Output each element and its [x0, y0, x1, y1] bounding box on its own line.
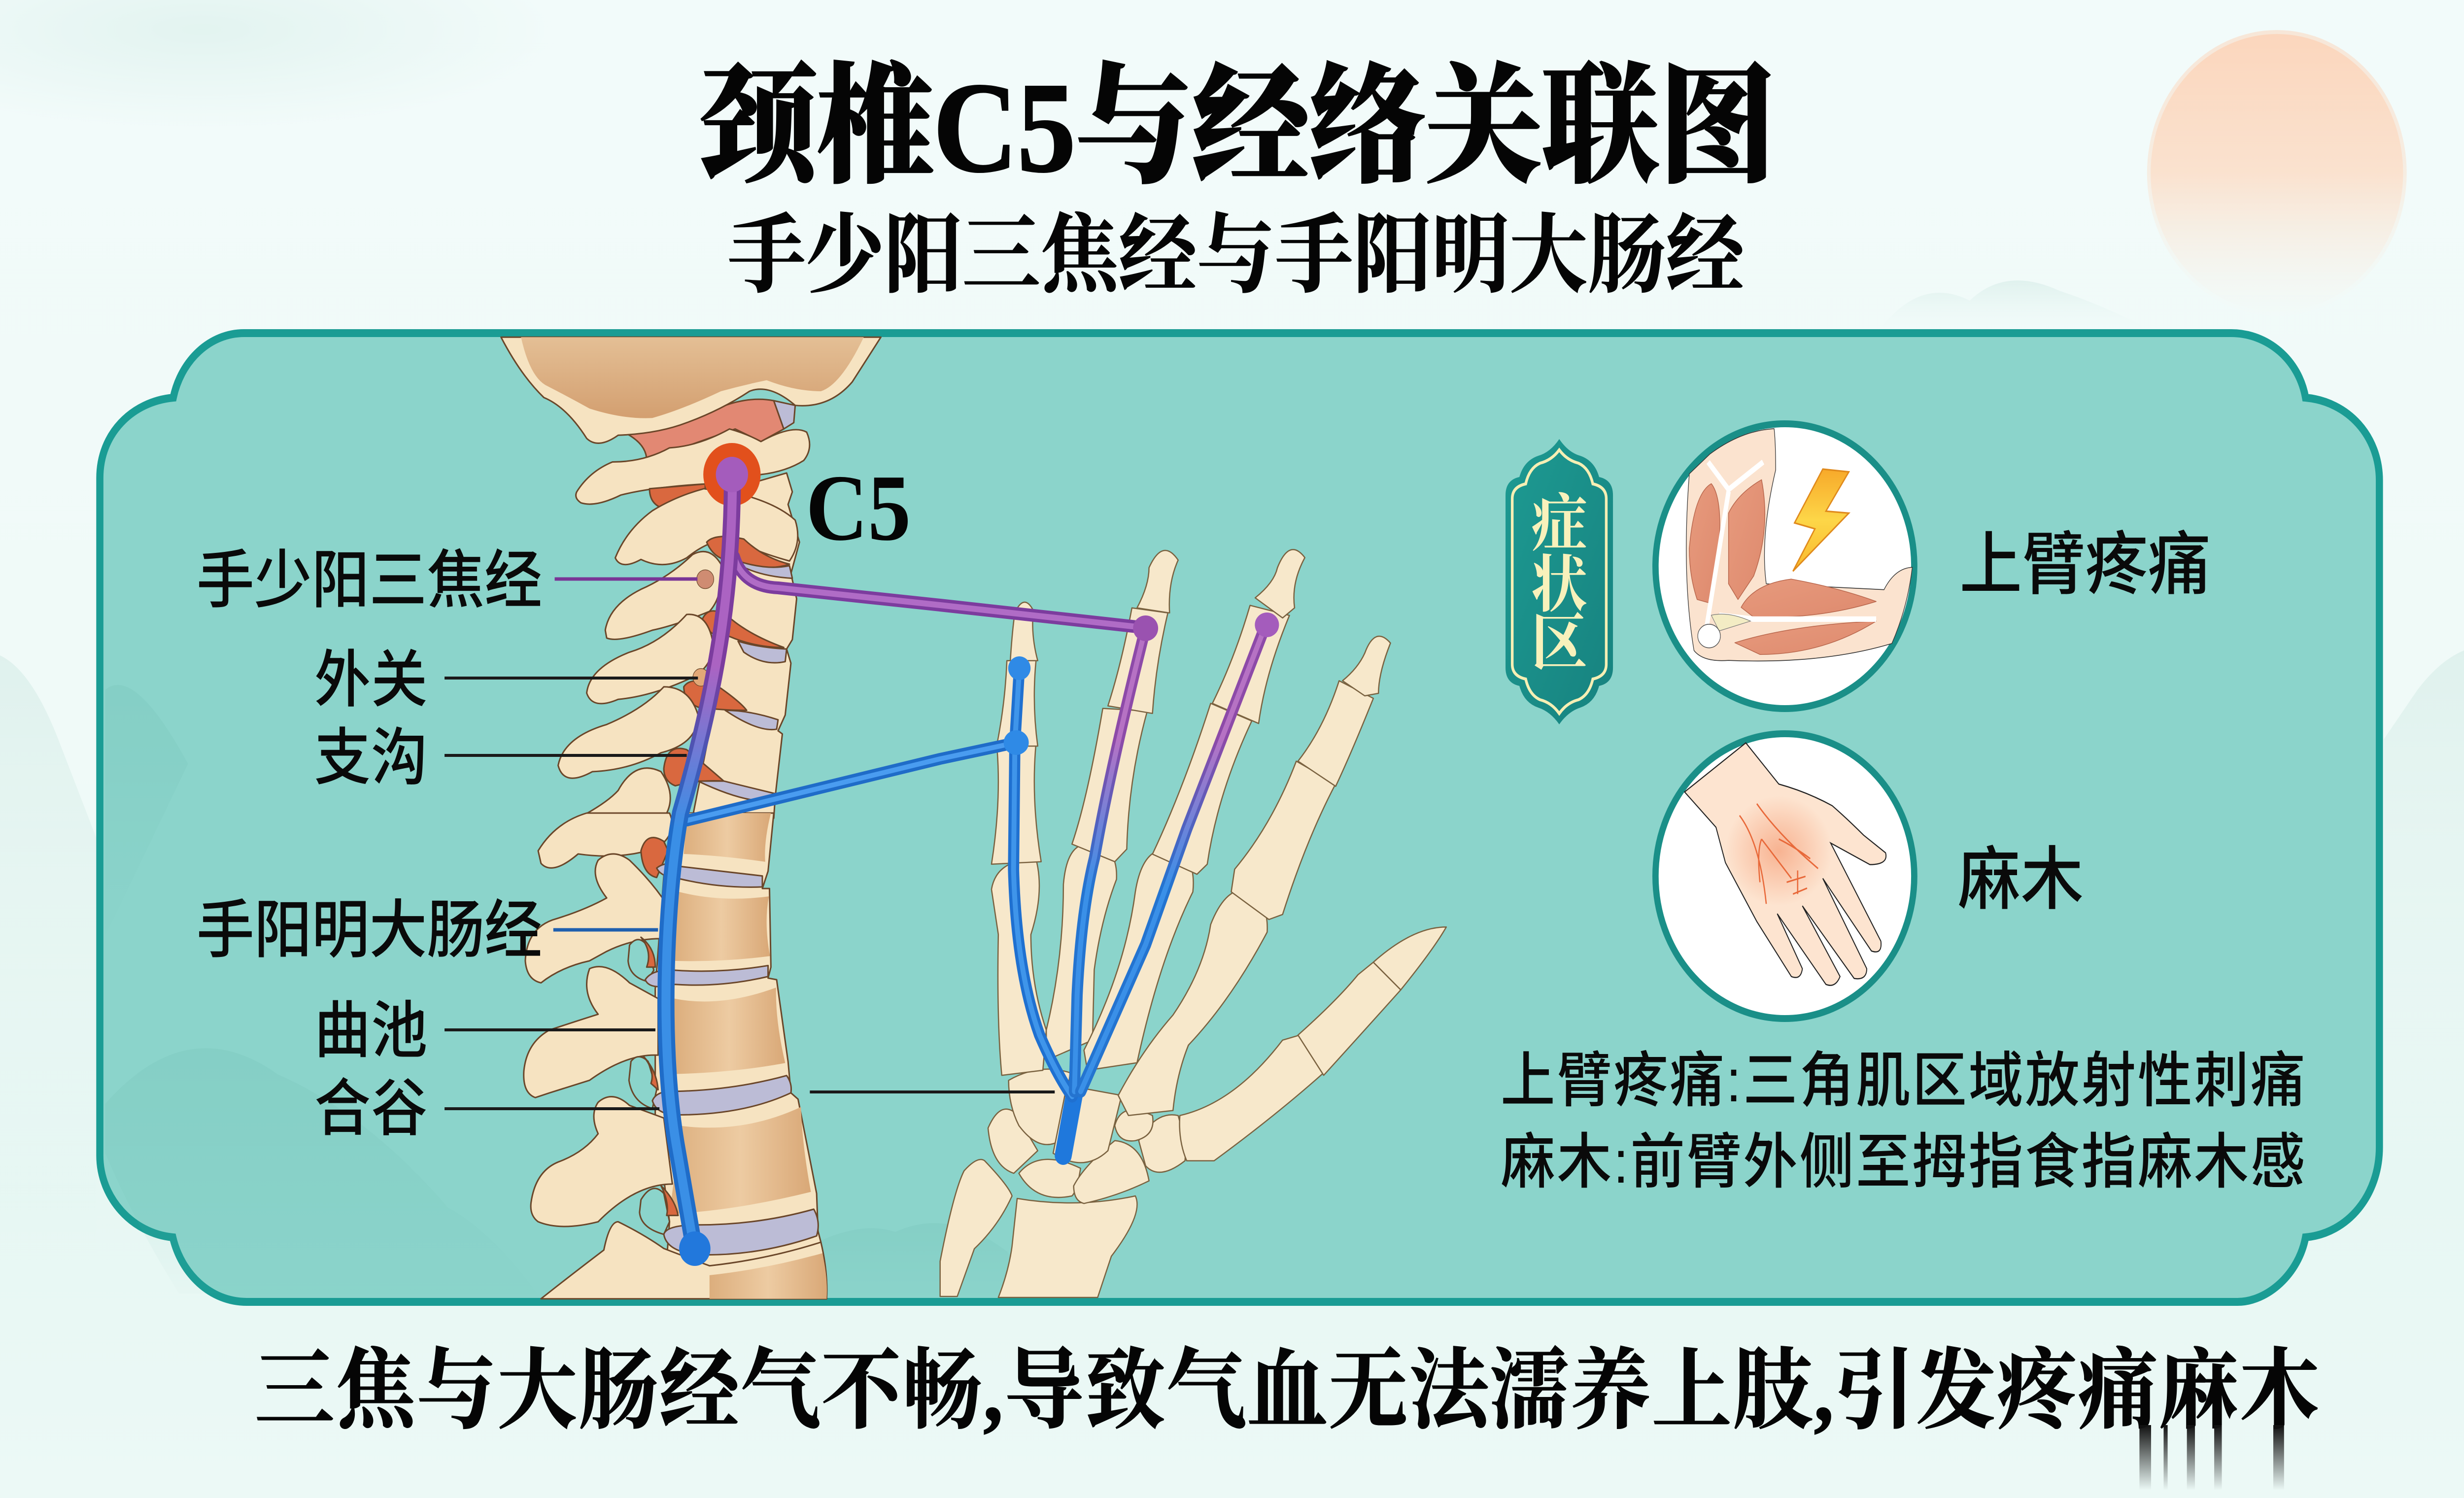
thumb bones	[1180, 1035, 1324, 1161]
label: 外关: 外关	[314, 645, 428, 715]
skull base	[501, 337, 881, 460]
label: 麻木: 麻木	[1958, 841, 2084, 918]
label: C5: C5	[806, 455, 911, 560]
title: 颈椎C5与经络关联图	[700, 57, 1776, 200]
subtitle: 手少阳三焦经与手阳明大肠经	[727, 208, 1746, 304]
icon: upper-arm muscles with lightning	[1655, 424, 1914, 709]
label: 合谷: 合谷	[314, 1074, 428, 1143]
finger bones: ring	[1046, 844, 1117, 1060]
text drip artifacts	[2139, 1425, 2284, 1490]
C5 marker ring	[703, 443, 760, 506]
icon: numb hand	[1655, 734, 1914, 1019]
finger bones: index	[1118, 889, 1267, 1116]
finger bones: middle	[1084, 849, 1194, 1070]
large intestine branch to hand	[687, 743, 1016, 820]
lower vertebrae	[524, 813, 827, 1299]
pointer line to hand	[810, 1090, 1055, 1093]
meridian points	[679, 457, 1279, 1266]
badge: symptom zone: 区	[1531, 610, 1587, 678]
label: 支沟: 支沟	[314, 723, 428, 792]
sun	[2147, 30, 2407, 316]
main meridian trunk	[666, 476, 732, 1247]
badge: symptom zone: 状	[1531, 551, 1588, 620]
spine illustration	[501, 337, 881, 1299]
note: numbness: 麻木:前臂外侧至拇指食指麻木感	[1501, 1128, 2305, 1195]
bottom conclusion: 三焦与大肠经气不畅,导致气血无法濡养上肢,引发疼痛麻木	[255, 1342, 2320, 1440]
finger bones: little	[992, 859, 1046, 1075]
label: 手少阳三焦经: 手少阳三焦经	[197, 545, 542, 616]
carpal bones	[988, 1109, 1038, 1173]
hand branches	[1014, 625, 1266, 1156]
label: 手阳明大肠经: 手阳明大肠经	[197, 895, 542, 966]
panel: main diagram	[100, 333, 2379, 1302]
note: upper arm pain: 上臂疼痛:三角肌区域放射性刺痛	[1501, 1047, 2305, 1114]
panel frame	[100, 333, 2379, 1302]
upper vertebrae	[558, 429, 810, 818]
badge: symptom zone: 症	[1531, 490, 1587, 559]
hand skeleton illustration	[940, 549, 1446, 1297]
forearm bones	[940, 1159, 1012, 1296]
badge: symptom zone	[1506, 439, 1613, 724]
label: 曲池: 曲池	[314, 996, 428, 1065]
triple burner branch to hand	[734, 557, 1146, 628]
panel mountain texture	[105, 685, 1029, 1295]
label: 上臂疼痛: 上臂疼痛	[1959, 526, 2211, 603]
meridian paths	[666, 443, 1279, 1266]
